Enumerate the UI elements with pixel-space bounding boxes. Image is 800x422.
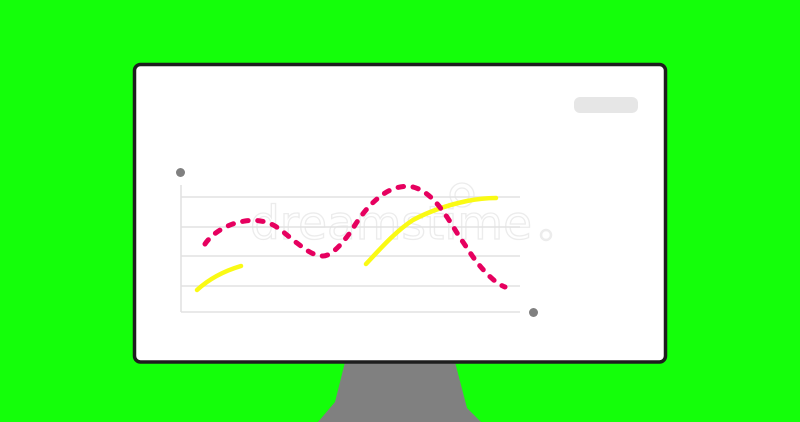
- monitor stand: [318, 362, 481, 422]
- yellow line segment 1: [197, 266, 241, 290]
- chart grid: [181, 185, 520, 312]
- pink dashed line: [205, 186, 505, 287]
- monitor screen: [134, 64, 666, 362]
- chart: [176, 168, 551, 317]
- legend pill: [574, 97, 638, 113]
- y axis dot: [176, 168, 185, 177]
- yellow line segment 2: [366, 198, 496, 264]
- watermark: dreamstime: [250, 196, 532, 250]
- x axis dot: [529, 308, 538, 317]
